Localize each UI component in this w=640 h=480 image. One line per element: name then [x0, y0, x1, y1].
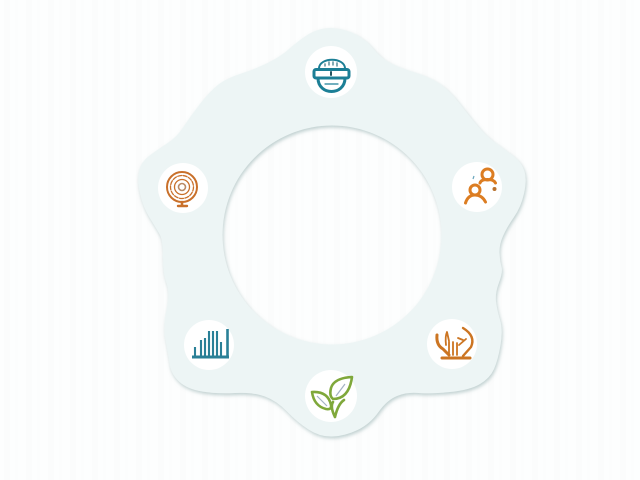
icon: two people badge — [452, 162, 502, 212]
panel: organic ring — [138, 28, 526, 437]
icon: globe on stand badge — [158, 163, 208, 213]
icon: green leaves badge — [305, 370, 357, 422]
icon: robot face badge — [305, 46, 357, 98]
icon: hands and crown badge — [427, 319, 477, 369]
icon: bar chart badge — [184, 320, 234, 370]
